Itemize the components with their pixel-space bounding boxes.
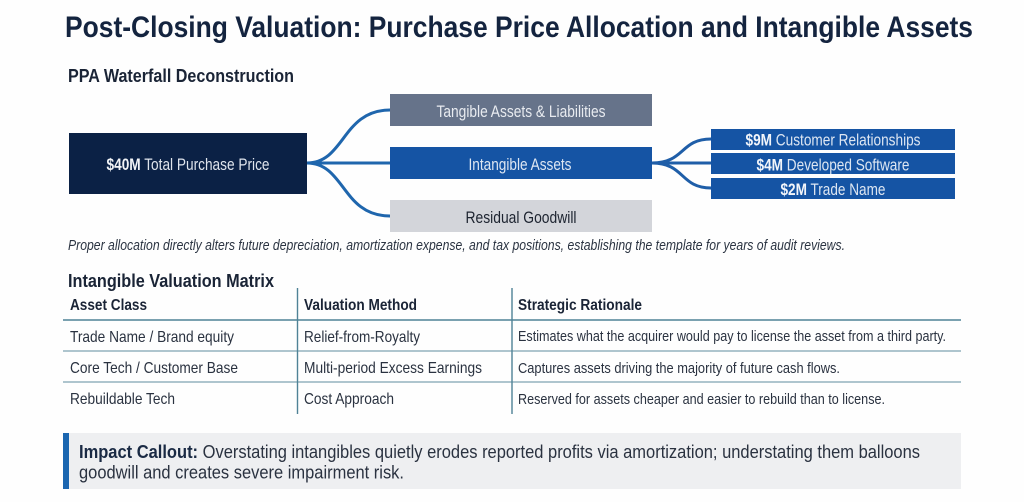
row: core tech (70, 360, 840, 377)
row: trade name (70, 329, 946, 346)
connectors: intangible breakdown (652, 139, 711, 188)
table header: Strategic Rationale (518, 297, 642, 314)
table header (70, 297, 642, 314)
row: trade name: Trade Name / Brand equity (70, 329, 234, 346)
row: core tech: Captures assets driving the majority of future cash flows. (518, 361, 840, 377)
row: rebuildable tech: Reserved for assets cheaper and easier to rebuild than to license. (518, 392, 885, 408)
box: residual goodwill (390, 200, 652, 232)
box: total purchase price: $40M Total Purchase Price (106, 155, 270, 174)
heading: valuation matrix: Intangible Valuation Matrix (68, 271, 274, 291)
table header: Valuation Method (304, 297, 417, 314)
row: trade name: Estimates what the acquirer would pay to license the asset from a third party. (518, 329, 946, 345)
table header: Asset Class (70, 297, 147, 314)
box: developed software: $4M Developed Software (756, 156, 910, 174)
row: rebuildable tech (70, 391, 885, 408)
box: intangible assets: Intangible Assets (468, 155, 572, 174)
box: intangible assets (390, 147, 652, 179)
box: tangible assets: Tangible Assets & Liabilities (436, 102, 606, 121)
impact callout (63, 433, 961, 489)
box: trade name (711, 178, 955, 199)
row: core tech: Core Tech / Customer Base (70, 360, 238, 377)
box: residual goodwill: Residual Goodwill (466, 208, 576, 227)
impact callout: Impact Callout: Overstating intangibles quietly erodes reported profits via amortization; understating them balloons (79, 441, 920, 462)
heading: PPA waterfall: PPA Waterfall Deconstruction (68, 65, 294, 86)
waterfall diagram (69, 94, 955, 232)
row: core tech: Multi-period Excess Earnings (304, 360, 482, 377)
box: developed software (711, 153, 955, 174)
impact callout: goodwill and creates severe impairment risk. (79, 462, 404, 482)
row: rebuildable tech: Cost Approach (304, 391, 394, 408)
valuation matrix table (63, 288, 961, 414)
box: total purchase price (69, 133, 307, 194)
box: trade name: $2M Trade Name (780, 181, 886, 199)
row: trade name: Relief-from-Royalty (304, 329, 420, 346)
row: rebuildable tech: Rebuildable Tech (70, 391, 175, 408)
box: customer relationships: $9M Customer Relationships (746, 131, 920, 149)
connectors: purchase price to allocation (307, 110, 390, 216)
box: tangible assets (390, 94, 652, 126)
italic caption: Proper allocation directly alters future depreciation, amortization expense, and tax positions, establishing the template for years of audit reviews. (68, 238, 845, 254)
